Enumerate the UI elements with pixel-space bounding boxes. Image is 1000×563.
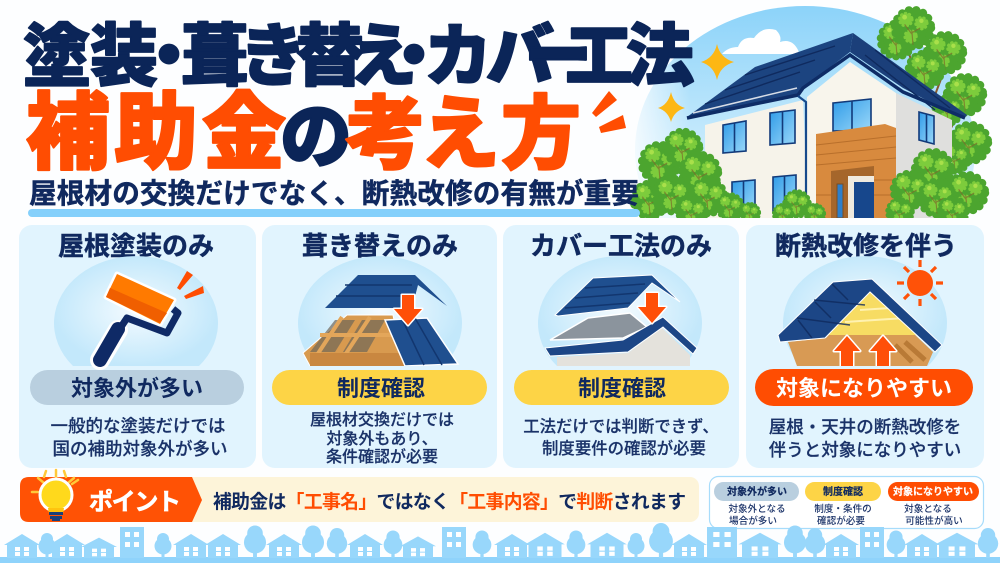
panel: with insulation: [746, 225, 984, 468]
panel: reroofing only: 対象外もあり、: [326, 429, 438, 448]
panel: reroofing only: 条件確認が必要: [326, 447, 438, 466]
panel: with insulation: 伴うと対象になりやすい: [769, 440, 961, 460]
legend item: likely eligible: 可能性が高い: [905, 515, 963, 527]
description: 屋根・天井の断熱改修を: [769, 417, 961, 437]
description: 工法だけでは判断できず、: [523, 418, 719, 436]
panel: roof painting only: [19, 225, 256, 468]
left wall: [705, 100, 808, 218]
heading: カバー工法のみ: [530, 231, 712, 261]
icon circle: [54, 256, 218, 366]
point banner: [20, 470, 699, 522]
legend: [710, 476, 984, 528]
legend item: check scheme: [805, 482, 881, 527]
point label: ポイント: [89, 489, 181, 516]
subtitle underline: [28, 209, 640, 217]
legend item: mostly excluded: 場合が多い: [729, 515, 777, 527]
icon circle: [538, 256, 702, 366]
hero illustration: house with trees and sky: [630, 6, 992, 218]
description: 一般的な塗装だけでは: [50, 416, 226, 436]
windows: [723, 99, 934, 212]
legend item: check scheme: 確認が必要: [817, 515, 865, 527]
icon: sun: [897, 260, 943, 306]
title line 2: 補助金: [26, 86, 286, 180]
icon: cover roof: [545, 275, 697, 366]
legend item: mostly excluded: 対象外となる: [728, 503, 786, 515]
sky: [635, 6, 974, 218]
panel: cover method only: 制度確認: [578, 376, 666, 401]
status pill: [755, 369, 973, 406]
legend item: check scheme: 制度確認: [823, 485, 863, 498]
title line 2: [26, 86, 581, 180]
right side wall: [896, 93, 952, 218]
legend item: likely eligible: 対象になりやすい: [893, 485, 973, 498]
panel: reroofing only: [262, 225, 497, 468]
status pill: [514, 370, 729, 405]
title line 2: の: [280, 98, 352, 178]
skyline decoration: [0, 523, 1000, 563]
emphasis marks: [592, 91, 626, 133]
icon: light bulb: [32, 470, 78, 521]
status pill: [272, 370, 487, 405]
legend item: likely eligible: 対象となる: [904, 503, 952, 515]
cloud: [722, 29, 799, 54]
title line 2: 考え方: [345, 90, 581, 179]
roof: [687, 33, 853, 117]
panel: cover method only: [503, 225, 739, 468]
legend item: mostly excluded: [714, 482, 799, 527]
title line 1: 塗装・葺き替え・カバー工法: [23, 19, 694, 95]
sparkles: [701, 44, 734, 80]
heading: 葺き替えのみ: [302, 231, 458, 261]
heading: 屋根塗装のみ: [58, 231, 214, 261]
panel: roof painting only: 対象外が多い: [71, 376, 203, 401]
panel: reroofing only: 制度確認: [337, 376, 425, 401]
panel: with insulation: 対象になりやすい: [776, 376, 952, 401]
status pill: [30, 370, 244, 405]
subtitle: 屋根材の交換だけでなく、断熱改修の有無が重要: [29, 178, 639, 209]
icon circle: [783, 256, 947, 366]
legend item: check scheme: 制度・条件の: [814, 503, 872, 515]
legend item: likely eligible: [888, 482, 979, 527]
trees behind house: [880, 10, 988, 171]
front gable wall: [807, 62, 896, 218]
trees in front: [634, 132, 985, 226]
icon: paint roller: [100, 271, 204, 360]
point message: 補助金は「工事名」ではなく「工事内容」で判断されます: [213, 491, 686, 512]
orange porch: [816, 124, 896, 218]
icon: roof replacement: [303, 275, 458, 366]
icon circle: [298, 256, 462, 366]
description: 屋根材交換だけでは: [310, 411, 454, 429]
house: [687, 33, 967, 218]
panel: roof painting only: 国の補助対象外が多い: [52, 439, 228, 459]
heading: 断熱改修を伴う: [775, 231, 957, 261]
downpipe: [798, 96, 806, 197]
legend item: mostly excluded: 対象外が多い: [727, 485, 787, 498]
panel: cover method only: 制度要件の確認が必要: [542, 439, 706, 458]
icon: insulated roof: [778, 279, 942, 366]
door: [854, 182, 874, 218]
